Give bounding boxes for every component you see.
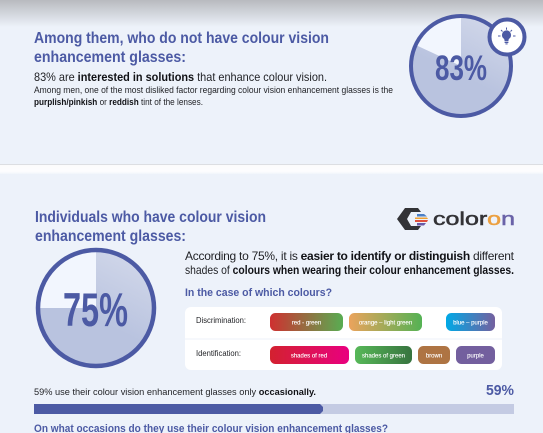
top shadow band xyxy=(0,0,543,27)
row: identification: shades of red xyxy=(291,353,327,359)
row: discrimination: blue – purple xyxy=(453,320,489,326)
heading: individuals xyxy=(35,209,266,245)
table: colours xyxy=(185,307,502,370)
row: identification: shades of green xyxy=(362,353,405,359)
section separator xyxy=(0,164,543,174)
row: identification: brown xyxy=(426,353,442,359)
heading: among them xyxy=(34,30,329,66)
row: discrimination: Discrimination: xyxy=(196,316,246,325)
row: identification: Identification: xyxy=(196,349,241,358)
text: according to 75% xyxy=(185,249,515,277)
panel: without glasses xyxy=(34,16,524,116)
chart: 75% pie xyxy=(38,250,154,366)
icon: light bulb badge xyxy=(490,20,524,54)
row: discrimination: orange – light green xyxy=(359,320,412,326)
text: occasionally: 59% use their colour vision enhancement glasses only occasionally. xyxy=(34,387,316,398)
chart: 83% pie: 83% xyxy=(435,49,487,88)
heading: among them: Among them, who do not have colour vision xyxy=(34,30,329,47)
logo: coloron: color on xyxy=(433,209,515,229)
panel: with glasses xyxy=(34,208,515,433)
text: interested in solutions: 83% are interested in solutions that enhance colour vision. xyxy=(34,70,327,84)
chart: 83% pie xyxy=(411,16,511,116)
value: 59%: 59% xyxy=(486,382,514,399)
text: according to 75%: According to 75%, it is easier to identify or distinguish different xyxy=(185,249,515,263)
logo: coloron xyxy=(397,208,515,230)
heading: among them: enhancement glasses: xyxy=(34,49,186,66)
heading: individuals: enhancement glasses: xyxy=(35,228,186,245)
row: identification xyxy=(196,346,495,364)
subheading: which colours: In the case of which colours? xyxy=(185,287,332,299)
row: identification: purple xyxy=(467,353,484,359)
chart: 75% pie: 75% xyxy=(63,283,128,336)
text: disliked factor: purplish/pinkish or reddish tint of the lenses. xyxy=(34,97,203,107)
text: disliked factor xyxy=(34,85,393,107)
heading: individuals: Individuals who have colour vision xyxy=(35,209,266,226)
text: disliked factor: Among men, one of the most disliked factor regarding colour vision enhancement glasses is the xyxy=(34,85,393,95)
row: discrimination xyxy=(196,313,495,331)
progress bar: 59% xyxy=(34,404,514,414)
row: discrimination: red - green xyxy=(292,320,321,326)
